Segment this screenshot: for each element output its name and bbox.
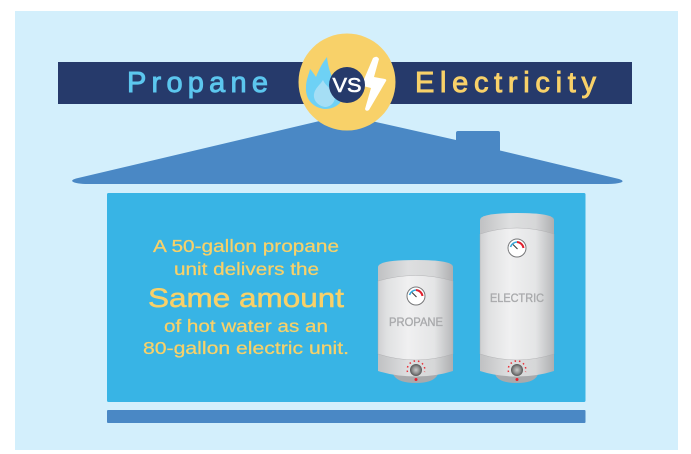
label: ELECTRIC: ELECTRIC bbox=[490, 291, 544, 305]
icon: lightning bolt bbox=[362, 57, 386, 111]
control knob bbox=[508, 361, 526, 381]
label: PROPANE: PROPANE bbox=[389, 315, 443, 329]
icon: propane flame bbox=[306, 57, 341, 109]
heater foot bbox=[393, 374, 438, 383]
vs badge bbox=[298, 34, 396, 130]
text block: comparison statement: Same amount bbox=[148, 283, 345, 313]
title banner bbox=[58, 62, 632, 104]
vs circle bbox=[329, 67, 365, 103]
gauge bbox=[508, 239, 526, 257]
text block: comparison statement: of hot water as an bbox=[164, 316, 328, 336]
heater foot bbox=[495, 374, 538, 383]
heater bottom cap bbox=[378, 352, 453, 376]
house body panel bbox=[107, 193, 586, 402]
heading: Propane: Propane bbox=[127, 67, 268, 99]
propane water heater bbox=[378, 260, 453, 383]
heater body bbox=[378, 276, 453, 360]
house roof with chimney bbox=[72, 115, 623, 184]
heater top cap bbox=[378, 260, 453, 282]
control knob bbox=[407, 361, 425, 381]
vs label: VS bbox=[332, 75, 362, 97]
text block: comparison statement: unit delivers the bbox=[174, 259, 319, 279]
electric water heater bbox=[480, 213, 554, 383]
text block: comparison statement: 80-gallon electric unit. bbox=[143, 338, 349, 358]
heater body bbox=[480, 228, 554, 360]
heater top cap bbox=[480, 213, 554, 236]
heading: Electricity: Electricity bbox=[415, 67, 596, 99]
heater bottom cap bbox=[480, 352, 554, 376]
gauge bbox=[407, 287, 425, 305]
text block: comparison statement bbox=[143, 236, 349, 358]
house base strip bbox=[107, 410, 586, 423]
text block: comparison statement: A 50-gallon propane bbox=[153, 236, 339, 256]
badge circle bbox=[298, 34, 396, 130]
